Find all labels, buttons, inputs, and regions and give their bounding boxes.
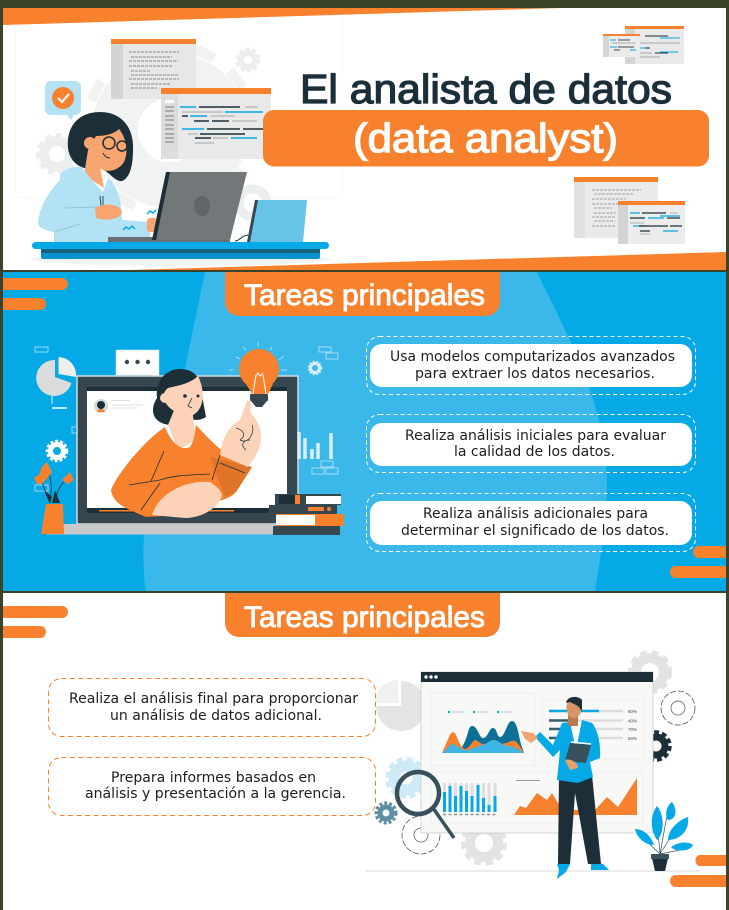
card 1: Usa modelos computarizados avanzados xyxy=(390,349,675,365)
icon: lightbulb xyxy=(229,342,287,407)
heading tab: Tareas principales xyxy=(244,279,485,312)
bottom orange stripe xyxy=(130,252,726,270)
code window front xyxy=(161,88,271,159)
card 2: la calidad de los datos. xyxy=(454,444,615,460)
woman xyxy=(111,369,261,518)
card 3: Realiza análisis adicionales para xyxy=(423,506,648,522)
card 3: determinar el significado de los datos. xyxy=(401,523,669,539)
progress bars xyxy=(549,709,637,741)
progress bars: 60% xyxy=(628,709,637,714)
heading tab: Tareas principales xyxy=(244,601,485,634)
magnifier xyxy=(397,772,454,838)
tablet xyxy=(235,200,307,242)
illustration: analyst at laptop xyxy=(30,39,330,266)
subtitle banner xyxy=(263,110,709,166)
small windows top right xyxy=(603,26,684,64)
card 5: análisis y presentación a la gerencia. xyxy=(85,786,346,802)
code window back xyxy=(111,39,196,99)
title: El analista de datos xyxy=(300,66,672,112)
illustration: woman on screen with idea xyxy=(34,342,344,535)
card 2 xyxy=(366,414,696,472)
card 1 xyxy=(366,336,696,394)
heading tab xyxy=(225,272,500,316)
icon: check bubble xyxy=(45,81,81,120)
desk xyxy=(32,242,329,259)
books xyxy=(269,494,344,535)
man xyxy=(521,697,609,879)
progress bars: 70% xyxy=(628,727,637,732)
background gears and pie xyxy=(365,652,700,871)
gear small white xyxy=(308,362,322,374)
card 3 xyxy=(366,494,696,552)
bar chart xyxy=(443,783,497,814)
orange pills right xyxy=(670,855,726,887)
orange area chart xyxy=(514,778,637,815)
legend xyxy=(448,711,512,713)
card 5 xyxy=(48,758,376,816)
card 4 xyxy=(48,678,376,736)
plant xyxy=(34,462,74,534)
speech bubble xyxy=(116,350,159,380)
dashboard window xyxy=(421,672,653,833)
decor outlines xyxy=(35,347,338,491)
progress bars: 50% xyxy=(628,736,637,741)
card 4: un análisis de datos adicional. xyxy=(110,708,322,724)
laptop xyxy=(108,172,247,242)
top orange stripe xyxy=(3,8,561,25)
panel: tareas white xyxy=(3,593,726,910)
orange pills right xyxy=(670,546,726,578)
card 5: Prepara informes basados en xyxy=(111,770,316,786)
gear white xyxy=(47,441,67,461)
card 2: Realiza análisis iniciales para evaluar xyxy=(405,428,666,444)
card 4: Realiza el análisis final para proporcionar xyxy=(69,691,358,707)
woman with hoodie xyxy=(38,112,157,242)
laptop base xyxy=(47,524,275,534)
progress bars: 40% xyxy=(628,718,637,724)
orange pills left xyxy=(3,606,68,638)
panel: header xyxy=(3,8,726,270)
pie chart xyxy=(36,357,76,409)
card 1: para extraer los datos necesarios. xyxy=(415,366,655,382)
small bar chart xyxy=(299,432,331,459)
panel: tareas blue xyxy=(3,272,726,591)
small windows bottom right xyxy=(574,177,685,244)
illustration: man presenting dashboard xyxy=(365,652,700,879)
potted plant xyxy=(635,802,693,871)
monitor xyxy=(77,376,298,524)
heading tab xyxy=(225,593,500,637)
orange pills left xyxy=(3,278,68,310)
area chart xyxy=(442,721,524,753)
subtitle banner: (data analyst) xyxy=(353,115,618,161)
